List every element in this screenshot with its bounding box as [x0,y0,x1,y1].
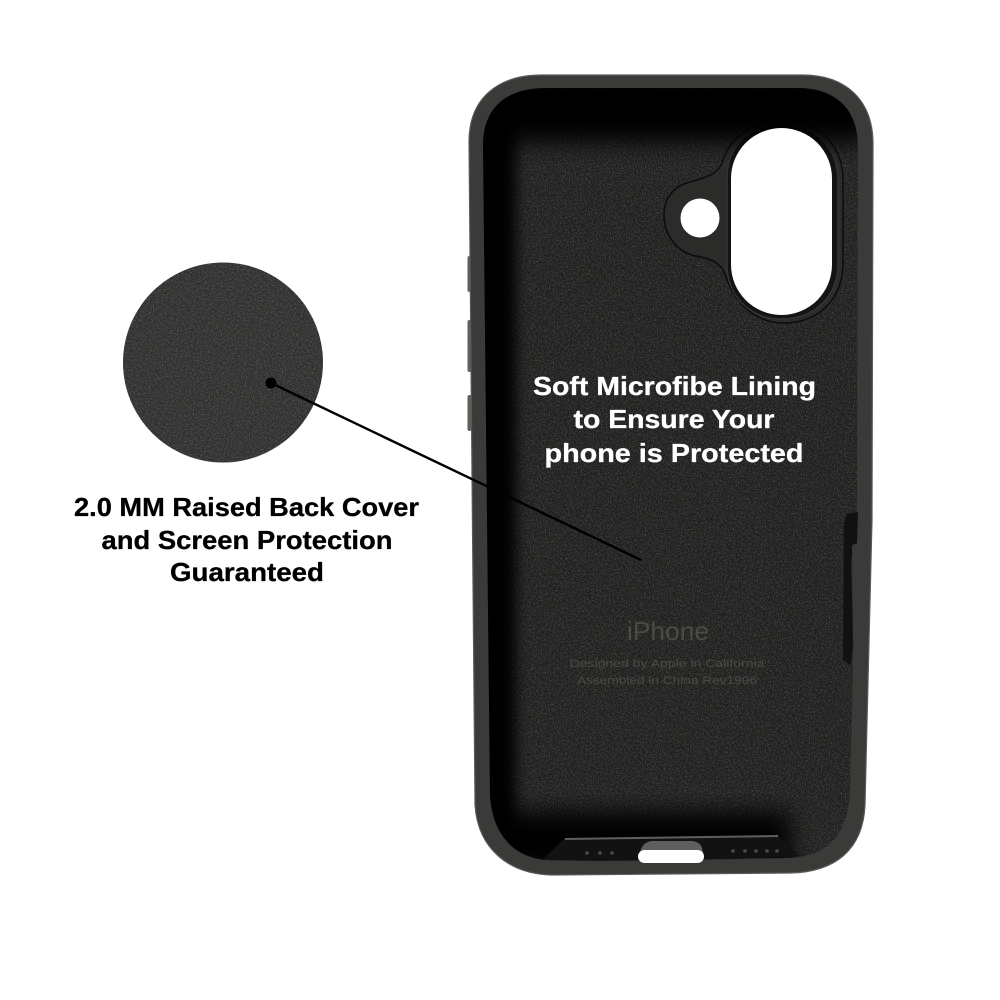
charging port shelf [542,836,800,863]
charging port opening [638,850,704,863]
side button recess [843,512,858,665]
raised cover caption: and Screen Protection [102,525,392,555]
lining caption: phone is Protected [544,438,804,468]
main camera cut-out [731,128,832,315]
lining caption [533,371,816,468]
small lens cut-out [680,198,720,238]
callout pointer [266,378,641,560]
debossed iPhone mark: iPhone [627,616,709,646]
debossed iPhone mark: Designed by Apple in California [570,658,766,670]
microfibre lining [470,70,870,872]
texture swatch [123,262,323,463]
raised cover caption: 2.0 MM Raised Back Cover [74,492,419,522]
camera cut-outs [680,128,832,315]
debossed iPhone mark [570,616,766,687]
inner wall shadows [470,70,870,872]
raised cover caption: Guaranteed [170,557,324,587]
lining caption: to Ensure Your [574,404,774,434]
camera island [664,120,843,323]
phone case [468,70,873,875]
camera ring [727,124,838,319]
case outer rim [469,75,873,875]
lining caption: Soft Microfibe Lining [533,371,816,401]
debossed iPhone mark: Assembled in China Rev1996 [577,675,757,687]
side buttons [468,256,472,431]
speaker holes [585,849,779,855]
raised cover caption [74,492,419,587]
